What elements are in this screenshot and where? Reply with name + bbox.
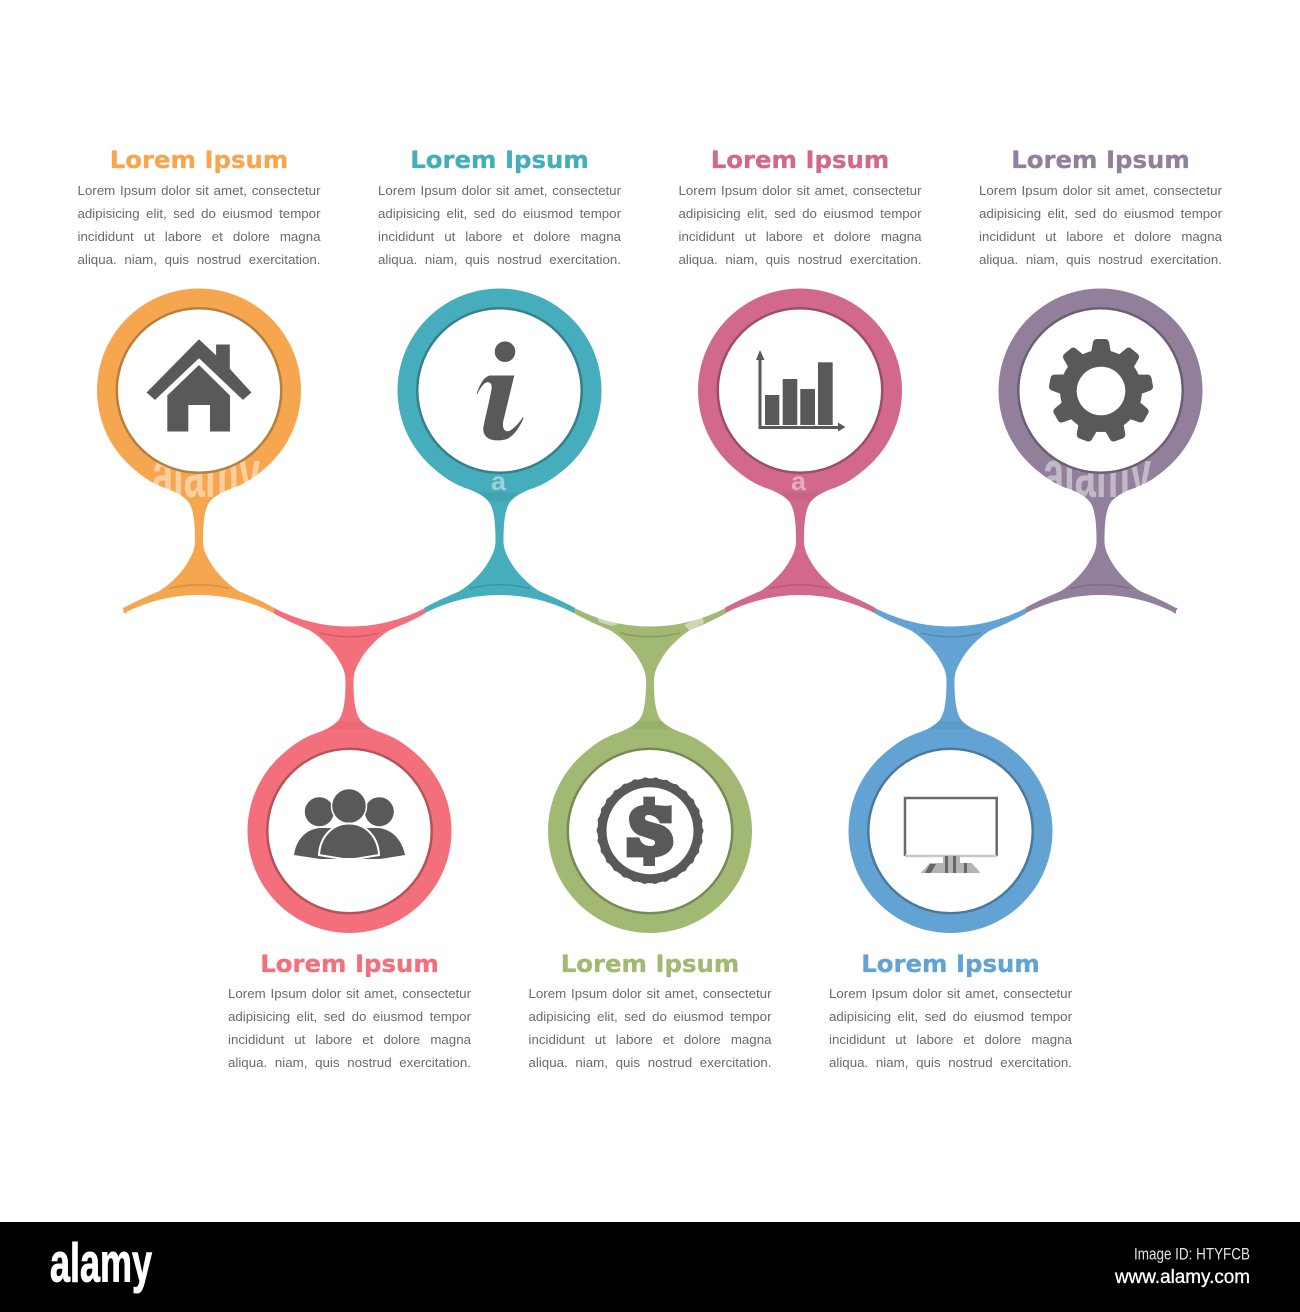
node: purple circle: alamy xyxy=(1043,436,1151,512)
node: red circle xyxy=(248,608,452,933)
node: blue circle xyxy=(848,608,1052,933)
text block: pink: aliqua. niam, quis nostrud exercitation. xyxy=(678,252,922,266)
text block: orange: Lorem Ipsum dolor sit amet, consectetur xyxy=(78,182,320,198)
node: teal circle: a xyxy=(491,466,507,496)
text block: red xyxy=(228,986,471,1070)
icon: bar chart xyxy=(756,350,846,432)
text block: red: Lorem Ipsum dolor sit amet, consectetur xyxy=(228,986,471,1000)
text block: red: adipisicing elit, sed do eiusmod tempor xyxy=(228,1008,471,1024)
text block: teal: incididunt ut labore et dolore magna xyxy=(378,228,621,244)
icon: gear xyxy=(1048,339,1154,443)
text block: red: aliqua. niam, quis nostrud exercitation. xyxy=(228,1054,471,1070)
icon: group of people xyxy=(294,788,405,859)
text block: purple: Lorem Ipsum dolor sit amet, consectetur xyxy=(979,182,1222,198)
text block: teal: adipisicing elit, sed do eiusmod tempor xyxy=(378,206,621,220)
heading: blue: Lorem Ipsum xyxy=(861,949,1040,978)
heading: green: Lorem Ipsum xyxy=(561,949,739,978)
text block: pink: adipisicing elit, sed do eiusmod tempor xyxy=(678,206,922,220)
text block: purple xyxy=(979,182,1222,266)
heading: orange: Lorem Ipsum xyxy=(110,145,288,174)
text block: orange: incididunt ut labore et dolore magna xyxy=(78,228,320,244)
text block: blue: aliqua. niam, quis nostrud exercitation. xyxy=(829,1054,1072,1070)
heading: pink: Lorem Ipsum xyxy=(711,145,889,174)
text block: orange: adipisicing elit, sed do eiusmod tempor xyxy=(78,206,320,220)
text block: purple: adipisicing elit, sed do eiusmod tempor xyxy=(979,206,1222,220)
icon: dollar coin xyxy=(601,782,699,880)
footer: black stock bar xyxy=(0,1222,1300,1312)
text block: orange: aliqua. niam, quis nostrud exercitation. xyxy=(78,252,320,266)
icon: computer monitor xyxy=(905,798,997,873)
node: pink circle: a xyxy=(791,466,807,496)
node: teal circle xyxy=(398,288,602,614)
text block: green: incididunt ut labore et dolore magna xyxy=(528,1032,772,1046)
icon: house xyxy=(147,340,251,432)
text block: blue xyxy=(829,986,1072,1070)
heading: purple: Lorem Ipsum xyxy=(1011,145,1190,174)
image id text: Image ID: HTYFCB xyxy=(1134,1244,1250,1264)
text block: green: aliqua. niam, quis nostrud exercitation. xyxy=(528,1054,772,1070)
text block: teal: Lorem Ipsum dolor sit amet, consectetur xyxy=(378,182,621,198)
heading: teal: Lorem Ipsum xyxy=(410,145,589,174)
text block: purple: aliqua. niam, quis nostrud exercitation. xyxy=(979,252,1222,266)
brand logo text: alamy xyxy=(50,1232,152,1294)
text block: red: incididunt ut labore et dolore magna xyxy=(228,1032,471,1046)
text block: pink xyxy=(678,182,922,266)
heading: red: Lorem Ipsum xyxy=(260,949,439,978)
node: orange circle: alamy xyxy=(152,436,260,512)
node: green circle xyxy=(548,608,752,933)
text block: blue: Lorem Ipsum dolor sit amet, consectetur xyxy=(829,986,1072,1000)
text block: pink: Lorem Ipsum dolor sit amet, consectetur xyxy=(678,182,922,198)
website text: www.alamy.com xyxy=(1114,1267,1250,1288)
text block: green xyxy=(528,986,772,1070)
text block: blue: adipisicing elit, sed do eiusmod tempor xyxy=(829,1008,1072,1024)
node: orange circle xyxy=(97,288,301,614)
text block: green: Lorem Ipsum dolor sit amet, consectetur xyxy=(528,986,772,1000)
text block: pink: incididunt ut labore et dolore magna xyxy=(678,228,922,244)
text block: teal xyxy=(378,182,621,266)
text block: teal: aliqua. niam, quis nostrud exercitation. xyxy=(378,252,621,266)
text block: purple: incididunt ut labore et dolore magna xyxy=(979,228,1222,244)
text block: blue: incididunt ut labore et dolore magna xyxy=(829,1032,1072,1046)
node: pink circle xyxy=(698,288,902,614)
icon: information xyxy=(477,341,524,440)
text block: green: adipisicing elit, sed do eiusmod tempor xyxy=(528,1008,772,1024)
text block: orange xyxy=(78,182,320,266)
node: purple circle xyxy=(998,288,1202,614)
